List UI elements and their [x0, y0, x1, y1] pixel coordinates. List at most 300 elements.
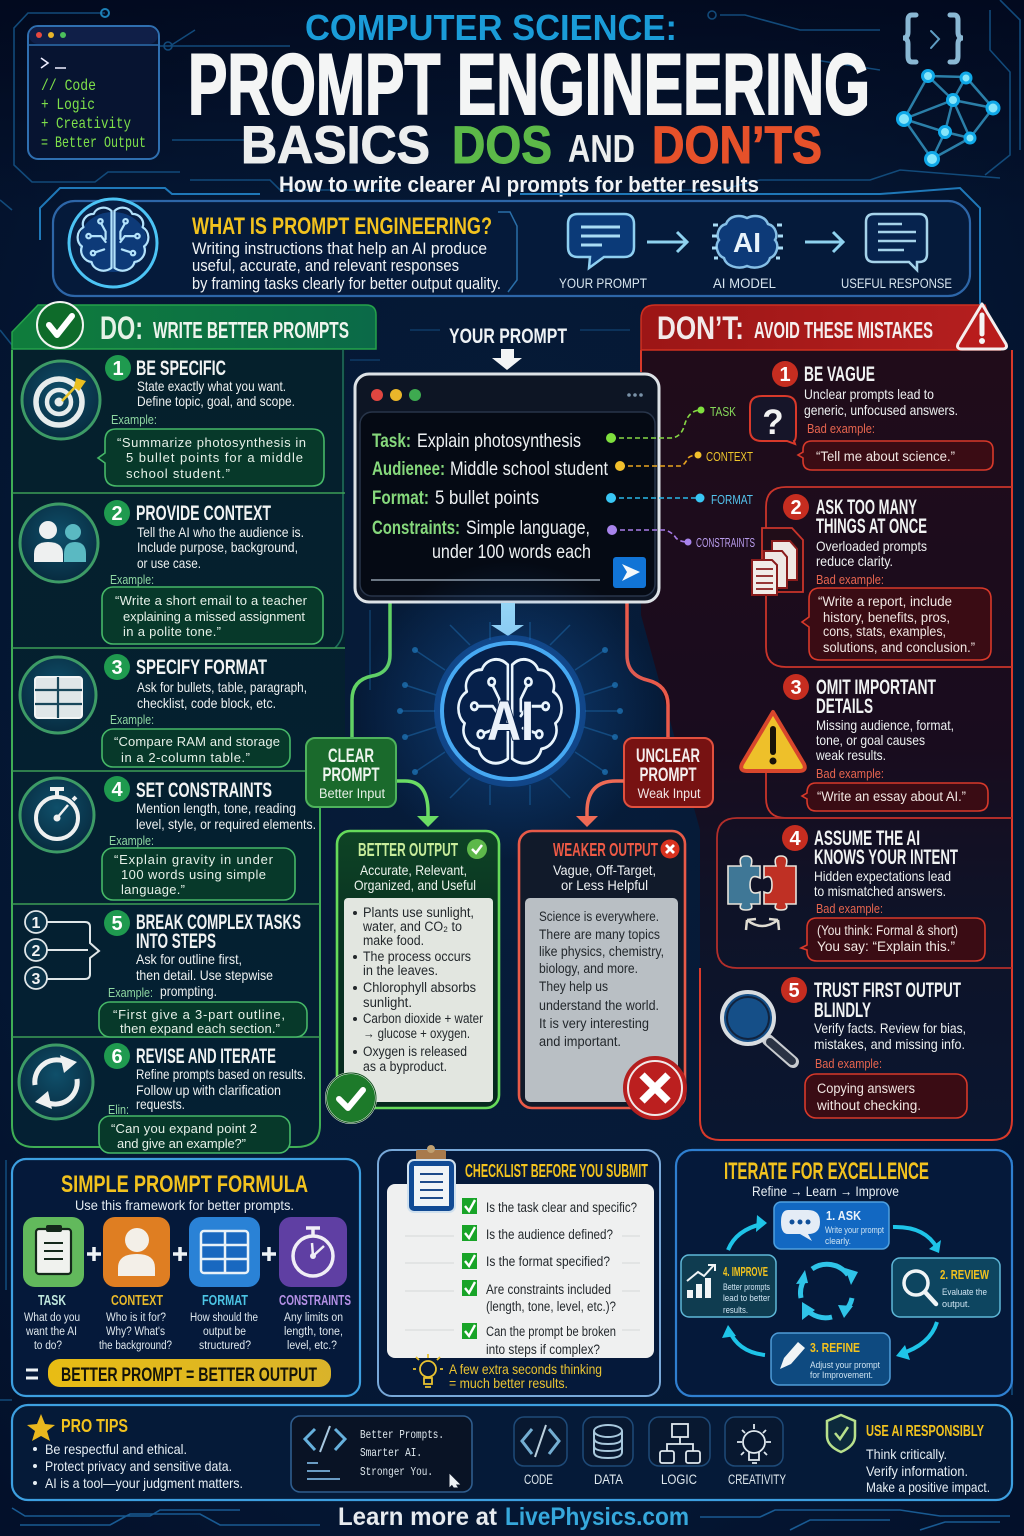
definition text: by framing tasks clearly for better output quality. [192, 275, 501, 293]
weak output text: and important. [539, 1034, 621, 1049]
item 6: revise and iterate: Follow up with clarification [136, 1082, 281, 1098]
footer: Learn more at [338, 1503, 498, 1531]
item 4: set constraints: “Explain gravity in under [114, 852, 274, 867]
code card: Stronger You. [360, 1465, 433, 1479]
responsibility text: Verify information. [866, 1463, 968, 1479]
tips list: AI is a tool—your judgment matters. [45, 1475, 243, 1491]
item 1: be specific: BE SPECIFIC [136, 357, 226, 380]
mistake 1: be vague [750, 361, 993, 470]
formula descriptions: level, etc.? [287, 1340, 337, 1352]
definition text: Writing instructions that help an AI produce [192, 240, 487, 258]
tile: code [514, 1417, 567, 1487]
card: better output [326, 831, 499, 1123]
mistake 2: ask too many things: cons, stats, examples, [823, 624, 946, 639]
checklist items: (length, tone, level, etc.)? [486, 1299, 616, 1314]
mistake 3: omit important details: 3 [790, 677, 802, 699]
card: better output: Accurate, Relevant, [360, 862, 467, 878]
checklist items: Can the prompt be broken [486, 1324, 616, 1339]
tile: logic [649, 1417, 710, 1487]
header band: AVOID THESE MISTAKES [754, 317, 933, 343]
panel: iterate for excellence: Refine → Learn → Improve [752, 1183, 899, 1199]
item 6: revise and iterate: “Can you expand point 2 [111, 1121, 257, 1136]
step 2: review: 2. REVIEW [940, 1267, 990, 1282]
arrow: prompt to model [647, 232, 687, 252]
item 2: provide context: 2 [111, 503, 123, 525]
formula labels: FORMAT [202, 1293, 248, 1309]
mistake 1: be vague: “Tell me about science.” [816, 449, 955, 464]
mistake 1: be vague: BE VAGUE [804, 363, 875, 386]
formula descriptions: want the AI [25, 1326, 77, 1338]
mistake 3: omit important details: “Write an essay about AI.” [817, 789, 966, 804]
tip text: A few extra seconds thinking [449, 1361, 602, 1377]
annotations: prompt parts: CONSTRAINTS [696, 535, 755, 550]
mistake 1: be vague: 1 [779, 364, 791, 386]
definition text: useful, accurate, and relevant responses [192, 257, 459, 275]
item 5: break complex tasks: “First give a 3-part outline, [113, 1007, 285, 1022]
step 2: review [892, 1258, 1000, 1317]
mistake 2: ask too many things: THINGS AT ONCE [816, 515, 927, 538]
icon: warning triangle [958, 304, 1006, 349]
icon: big cross [624, 1057, 686, 1119]
terminal panel: + Logic [41, 96, 95, 114]
icon: numbered steps: 2 [32, 943, 41, 960]
step 4: improve: lead to better [723, 1293, 770, 1304]
mistake 2: ask too many things: history, benefits, pros, [823, 610, 950, 625]
prompt fields: 5 bullet points [435, 487, 539, 509]
output bullets: sunlight. [363, 995, 412, 1010]
tile: creativity: CREATIVITY [728, 1472, 786, 1487]
output bullets: Chlorophyll absorbs [363, 980, 476, 995]
icon: brain badge [69, 199, 157, 287]
card: weaker output: WEAKER OUTPUT [553, 840, 658, 860]
header band: WRITE BETTER PROMPTS [153, 317, 349, 343]
item 3: specify format: “Compare RAM and storage [114, 734, 280, 749]
title: DON’TS [652, 116, 822, 175]
mistake 1: be vague: generic, unfocused answers. [804, 402, 958, 418]
formula descriptions: Why? What's [106, 1326, 165, 1338]
item 6: revise and iterate: requests. [136, 1096, 185, 1112]
panel: checklist: CHECKLIST BEFORE YOU SUBMIT [465, 1161, 648, 1181]
icon: refresh cycle [19, 1045, 93, 1119]
formula descriptions: What do you [24, 1312, 80, 1324]
mistake 2: ask too many things: Overloaded prompts [816, 538, 927, 554]
prompt fields: Simple language, [466, 517, 590, 539]
tile: creativity [725, 1417, 786, 1487]
item 5: break complex tasks: Ask for outline first, [136, 951, 242, 967]
mistake 4: assume the AI knows your intent: Hidden expectations lead [814, 868, 951, 884]
panel: simple prompt formula: Use this framework for better prompts. [75, 1197, 294, 1213]
output bullets: The process occurs [363, 949, 471, 964]
formula descriptions: structured? [199, 1340, 251, 1352]
item 3: specify format: 3 [111, 657, 123, 679]
step 3: refine [771, 1333, 890, 1385]
item 2: provide context: Tell the AI who the audience is. [137, 524, 304, 540]
title: AND [568, 128, 635, 171]
mistake 2: ask too many things: “Write a report, include [818, 594, 952, 609]
weak output text [539, 909, 664, 1049]
annotations: prompt parts [606, 404, 755, 550]
step 3: refine: Adjust your prompt [810, 1360, 880, 1371]
arrow: unclear prompt to weaker output [576, 781, 624, 827]
formula labels: CONSTRAINTS [279, 1293, 351, 1309]
step 1: ask: 1. ASK [826, 1208, 862, 1223]
card: better output: Organized, and Useful [354, 877, 476, 893]
item 5: break complex tasks: Example: [108, 986, 153, 1000]
responsibility text: Make a positive impact. [866, 1479, 990, 1495]
step 4: improve: 4. IMPROVE [723, 1264, 768, 1279]
output bullets: as a byproduct. [363, 1059, 447, 1074]
checklist items: into steps if complex? [486, 1342, 600, 1357]
title: COMPUTER SCIENCE: [305, 7, 677, 48]
tips list: Be respectful and ethical. [45, 1441, 187, 1457]
icon: useful response [866, 214, 927, 270]
connector: unclear prompt path [627, 602, 668, 738]
formula labels: CONTEXT [111, 1293, 163, 1309]
icon: numbered steps: 3 [32, 971, 41, 988]
item 6: revise and iterate: Elin: [108, 1103, 129, 1117]
item 3: specify format: in a 2-column table.” [121, 750, 250, 765]
checklist items: Are constraints included [486, 1282, 611, 1297]
item 3: specify format: Ask for bullets, table, paragraph, [137, 679, 307, 695]
step 3: refine: for Improvement. [810, 1370, 873, 1381]
step 4: improve: results. [723, 1305, 748, 1316]
mistake 4: assume the AI knows your intent: ASSUME THE AI [814, 827, 920, 850]
output bullets: → glucose + oxygen. [363, 1026, 470, 1041]
weak output text: It is very interesting [539, 1016, 649, 1031]
card: weaker output [519, 831, 686, 1119]
icon: shield [827, 1415, 855, 1452]
item 5: break complex tasks: then expand each section.” [120, 1021, 280, 1036]
icon: documents [752, 528, 803, 595]
item 2: provide context: in a polite tone.” [123, 624, 221, 639]
weak output text: There are many topics [539, 927, 660, 942]
weak output text: like physics, chemistry, [539, 944, 664, 959]
tile: data: DATA [594, 1472, 623, 1487]
icon: magnifier [722, 992, 793, 1062]
code card: Better Prompts. [360, 1428, 444, 1442]
tips list [33, 1441, 243, 1491]
icon: puzzle pieces [728, 856, 796, 930]
item 1: be specific: 5 bullet points for a middle [126, 450, 303, 465]
formula result pill: BETTER PROMPT = BETTER OUTPUT [61, 1364, 317, 1386]
output bullets: Carbon dioxide + water [363, 1011, 483, 1026]
step 3: refine: 3. REFINE [810, 1340, 860, 1355]
flow labels: YOUR PROMPT [559, 275, 647, 291]
mistake 1: be vague: Unclear prompts lead to [804, 386, 934, 402]
formula descriptions: How should the [190, 1312, 258, 1324]
output bullets: in the leaves. [363, 963, 438, 978]
prompt fields [372, 430, 608, 563]
output bullets: make food. [363, 933, 424, 948]
icon: caution triangle [741, 712, 805, 771]
terminal panel: // Code [41, 77, 96, 95]
item 4: set constraints [20, 776, 316, 900]
item 4: set constraints: language.” [121, 882, 185, 897]
step 1: ask: Write your prompt [825, 1225, 884, 1236]
checklist items: Is the format specified? [486, 1254, 610, 1269]
formula labels: TASK [38, 1293, 66, 1309]
mistake 4: assume the AI knows your intent: to mismatched answers. [814, 883, 946, 899]
mistake 1: be vague: Bad example: [807, 422, 875, 436]
prompt window [355, 374, 659, 602]
definition text [192, 240, 501, 293]
icon: AI model: AI [733, 227, 761, 258]
annotations: prompt parts: FORMAT [711, 492, 753, 507]
item 4: set constraints: 100 words using simple [121, 867, 266, 882]
mistake 2: ask too many things: 2 [790, 497, 802, 519]
footer: LivePhysics.com [505, 1503, 689, 1531]
tile: constraints [279, 1217, 347, 1287]
responsibility text: Think critically. [866, 1446, 947, 1462]
card: better output: BETTER OUTPUT [358, 840, 458, 860]
panel: do write better prompts [12, 302, 376, 1153]
step 1: ask: clearly. [825, 1236, 851, 1247]
step 2: review: Evaluate the [942, 1287, 987, 1298]
item 2: provide context: “Write a short email to a teacher [115, 593, 308, 608]
cycle arrows [722, 1215, 941, 1360]
item 5: break complex tasks: BREAK COMPLEX TASKS [136, 911, 301, 934]
panel: don't avoid these mistakes [641, 304, 1012, 1140]
flow labels: AI MODEL [713, 275, 776, 291]
item 1: be specific: 1 [112, 358, 124, 380]
mistake 4: assume the AI knows your intent: (You think: Formal & short) [817, 923, 958, 938]
item 3: specify format: Example: [110, 713, 154, 727]
mistake 2: ask too many things: solutions, and conclusion.” [823, 640, 975, 655]
mistake 5: trust first output blindly: BLINDLY [814, 999, 871, 1022]
panel: pro tips strip: PRO TIPS [61, 1416, 128, 1436]
icon: your prompt bubble [568, 214, 634, 268]
mistake 4: assume the AI knows your intent: 4 [789, 828, 801, 850]
item 5: break complex tasks [25, 910, 307, 1037]
formula result pill [48, 1359, 331, 1387]
checklist items: Is the task clear and specific? [486, 1200, 637, 1215]
formula descriptions: Who is it for? [106, 1312, 166, 1324]
tile: task [23, 1217, 84, 1287]
item 3: specify format [20, 654, 307, 767]
title: BASICS [241, 116, 430, 175]
icon: target [22, 361, 100, 439]
prompt fields: under 100 words each [432, 541, 591, 563]
mistake 2: ask too many things: reduce clarity. [816, 553, 893, 569]
unclear prompt tag [624, 738, 713, 807]
output bullets: Oxygen is released [363, 1044, 467, 1059]
step 4: improve: Better prompts [723, 1282, 770, 1293]
icon: code braces [903, 15, 963, 62]
icon: numbered steps [25, 911, 99, 989]
item 5: break complex tasks: INTO STEPS [136, 930, 216, 953]
heading: what is prompt engineering: WHAT IS PROMPT ENGINEERING? [192, 213, 492, 240]
flow labels: USEFUL RESPONSE [841, 275, 952, 291]
icon tiles [514, 1417, 786, 1487]
icon: send button [613, 557, 646, 588]
panel: checklist [378, 1145, 660, 1396]
tips list: Protect privacy and sensitive data. [45, 1458, 232, 1474]
icon: table [20, 657, 96, 733]
code card: Smarter AI. [360, 1446, 422, 1460]
icon: question bubble: ? [762, 403, 784, 442]
AI core [360, 561, 660, 861]
icon: neural network [898, 70, 999, 166]
mistake 3: omit important details: Bad example: [816, 767, 884, 781]
formula descriptions: output be [203, 1326, 246, 1338]
weak output text: biology, and more. [539, 961, 638, 976]
prompt fields: Format: [372, 487, 429, 509]
card: weaker output: or Less Helpful [561, 877, 648, 893]
item 1: be specific: “Summarize photosynthesis in [117, 435, 306, 450]
panel: pro tips strip [12, 1405, 1012, 1500]
mistake 5: trust first output blindly: Bad example: [815, 1057, 882, 1071]
step 1: ask [774, 1202, 889, 1249]
header band [12, 302, 376, 349]
code card [291, 1416, 472, 1492]
output bullets: Plants use sunlight, [363, 905, 474, 920]
mistake 5: trust first output blindly [722, 977, 967, 1118]
card: weaker output: Vague, Off-Target, [553, 862, 656, 878]
mistake 3: omit important details: weak results. [815, 747, 886, 763]
AI core: AI [487, 689, 534, 752]
formula descriptions: Any limits on [284, 1312, 343, 1324]
clear prompt tag: CLEAR [328, 746, 374, 767]
panel: simple prompt formula [12, 1159, 360, 1396]
item 1: be specific: Example: [111, 413, 157, 427]
header band: DO: [100, 310, 143, 346]
unclear prompt tag: UNCLEAR [636, 746, 700, 767]
prompt fields: Explain photosynthesis [417, 430, 581, 452]
icon: people [20, 504, 98, 582]
mistake 5: trust first output blindly: mistakes, and missing info. [814, 1036, 965, 1052]
clear prompt tag: PROMPT [322, 765, 380, 786]
mistake 2: ask too many things [752, 494, 991, 660]
item 2: provide context: Example: [110, 573, 154, 587]
item 6: revise and iterate: Refine prompts based on results. [136, 1066, 306, 1082]
mistake 4: assume the AI knows your intent [728, 825, 985, 961]
icon: centre cycle [796, 1264, 858, 1320]
tile: context [103, 1217, 170, 1287]
formula descriptions: length, tone, [284, 1326, 343, 1338]
prompt fields: Middle school student [450, 458, 608, 480]
mistake 3: omit important details [741, 674, 988, 811]
arrow: into prompt window [492, 349, 522, 370]
icon: numbered steps: 1 [32, 915, 41, 932]
unclear prompt tag: Weak Input [638, 786, 701, 801]
mistake 4: assume the AI knows your intent: You say: “Explain this.” [817, 939, 955, 954]
arrow: clear prompt to better output [397, 781, 439, 827]
formula labels [38, 1293, 351, 1309]
centre: your prompt label: YOUR PROMPT [449, 325, 567, 348]
footer [12, 1503, 1010, 1531]
mistake 2: ask too many things: Bad example: [816, 573, 884, 587]
header band: DON’T: [657, 310, 744, 346]
item 1: be specific [22, 355, 324, 486]
mistake 5: trust first output blindly: without checking. [816, 1098, 921, 1113]
item 4: set constraints: Example: [109, 834, 154, 848]
item 6: revise and iterate: and give an example?” [117, 1136, 246, 1151]
connector: clear prompt path [352, 602, 390, 738]
weak output text: They help us [539, 979, 608, 994]
prompt fields: Audienee: [372, 458, 445, 480]
mistake 5: trust first output blindly: Copying answers [817, 1081, 915, 1096]
checklist items [405, 1198, 640, 1357]
title: DOS [452, 116, 552, 175]
item 4: set constraints: SET CONSTRAINTS [136, 779, 272, 802]
tip text: = much better results. [449, 1375, 568, 1391]
item 6: revise and iterate: REVISE AND ITERATE [136, 1045, 276, 1068]
clear prompt tag: Better Input [319, 786, 385, 801]
mistake 5: trust first output blindly: 5 [788, 980, 800, 1002]
item 1: be specific: Define topic, goal, and scope. [137, 393, 295, 409]
panel: simple prompt formula: SIMPLE PROMPT FORMULA [61, 1171, 308, 1198]
item 6: revise and iterate [19, 1043, 306, 1153]
icon: stopwatch [20, 778, 94, 852]
plus signs [87, 1247, 276, 1261]
icon: clipboard [408, 1145, 455, 1212]
item 3: specify format: SPECIFY FORMAT [136, 656, 267, 679]
checklist items: Is the audience defined? [486, 1227, 613, 1242]
item 4: set constraints: level, style, or required elements. [136, 816, 316, 832]
formula descriptions: the background? [99, 1340, 172, 1352]
item 5: break complex tasks: 5 [111, 913, 123, 935]
item 2: provide context: explaining a missed assignment [123, 609, 305, 624]
icon: question bubble [750, 396, 796, 444]
title [188, 7, 870, 175]
item 2: provide context: or use case. [137, 555, 201, 571]
arrow: prompt to AI [491, 603, 524, 636]
tile: data [583, 1417, 633, 1487]
prompt fields: Task: [372, 430, 411, 452]
formula descriptions [24, 1312, 343, 1352]
mistake 3: omit important details: OMIT IMPORTANT [816, 676, 936, 699]
tile: logic: LOGIC [661, 1472, 697, 1487]
icon: AI model [712, 216, 783, 268]
icon: light bulb [413, 1354, 443, 1387]
item 1: be specific: school student.” [126, 466, 230, 481]
clear prompt tag [306, 738, 396, 807]
subtitle: How to write clearer AI prompts for better results [279, 172, 759, 197]
mistake 5: trust first output blindly: Verify facts. Review for bias, [814, 1020, 966, 1036]
item 2: provide context: PROVIDE CONTEXT [136, 502, 271, 525]
item 1: be specific: State exactly what you want. [137, 378, 286, 394]
step 4: improve [681, 1255, 776, 1317]
mistake 3: omit important details: tone, or goal causes [816, 732, 925, 748]
mistake 2: ask too many things: ASK TOO MANY [816, 496, 917, 519]
output bullets: water, and CO₂ to [362, 919, 462, 934]
prompt fields: Constraints: [372, 517, 460, 539]
item 4: set constraints: Mention length, tone, reading [136, 800, 296, 816]
header band [641, 304, 1006, 350]
panel: what is prompt engineering [40, 188, 980, 305]
mistake 3: omit important details: Missing audience, format, [816, 717, 954, 733]
formula descriptions: to do? [34, 1340, 62, 1352]
unclear prompt tag: PROMPT [640, 765, 697, 786]
arrow: model to response [805, 232, 843, 252]
item 5: break complex tasks: prompting. [160, 983, 217, 999]
output bullets [353, 905, 483, 1074]
flow labels [559, 275, 952, 291]
item 2: provide context [20, 500, 323, 644]
mistake 4: assume the AI knows your intent: Bad example: [816, 902, 883, 916]
weak output text: understand the world. [539, 998, 659, 1013]
terminal panel [28, 26, 159, 159]
item 3: specify format: checklist, code block, etc. [137, 695, 276, 711]
icon: star [27, 1414, 55, 1441]
tip text [449, 1361, 602, 1391]
item 2: provide context: Include purpose, background, [137, 539, 298, 555]
icon: big check [326, 1073, 376, 1123]
item 6: revise and iterate: 6 [111, 1046, 123, 1068]
item 4: set constraints: 4 [111, 779, 123, 801]
tile: code: CODE [524, 1472, 553, 1487]
terminal panel: = Better Output [41, 134, 146, 152]
